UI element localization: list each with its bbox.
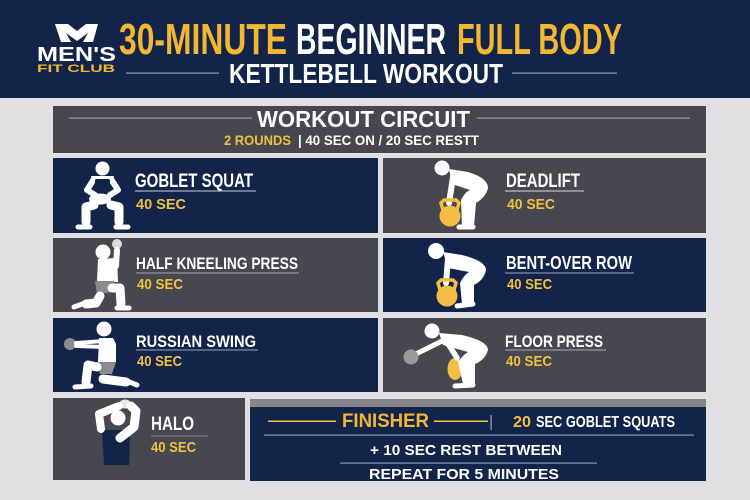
panel: bent-over row: BENT-OVER ROW [506, 253, 632, 273]
icon: floor press figure [404, 324, 488, 386]
panel: floor press: FLOOR PRESS [505, 332, 603, 351]
panel: goblet squat: 40 SEC [136, 196, 186, 213]
panel: workout circuit heading: 2 ROUNDS [224, 132, 291, 148]
panel: finisher: SEC GOBLET SQUATS [536, 414, 675, 431]
icon: deadlift figure [434, 160, 488, 227]
icon: halo figure [99, 400, 136, 465]
title line 1: FULL BODY [457, 15, 622, 64]
title line 2: KETTLEBELL WORKOUT [229, 58, 503, 89]
panel: russian swing [53, 318, 378, 392]
panel: halo: HALO [151, 414, 194, 435]
panel: bent-over row [383, 238, 706, 312]
panel: half kneeling press [53, 238, 378, 312]
logo [37, 24, 116, 75]
panel: workout circuit heading: WORKOUT CIRCUIT [257, 106, 470, 132]
panel: deadlift: 40 SEC [507, 196, 555, 213]
panel: workout circuit heading [53, 106, 706, 153]
panel: finisher: FINISHER [342, 411, 429, 432]
panel: finisher: + 10 SEC REST BETWEEN [370, 442, 562, 459]
header banner [0, 0, 750, 98]
panel: bent-over row: 40 SEC [507, 276, 552, 293]
panel: russian swing: RUSSIAN SWING [136, 332, 256, 351]
panel: finisher: REPEAT FOR 5 MINUTES [369, 466, 559, 483]
panel: russian swing: 40 SEC [137, 353, 182, 370]
panel: deadlift: DEADLIFT [506, 171, 580, 192]
title line 1 [119, 15, 622, 64]
panel: deadlift [383, 158, 706, 233]
title line 1: BEGINNER [296, 15, 446, 64]
panel: halo: 40 SEC [151, 439, 196, 456]
panel: half kneeling press: 40 SEC [137, 276, 183, 293]
logo: MEN'S [37, 44, 116, 66]
panel: floor press: 40 SEC [506, 353, 552, 370]
panel: goblet squat: GOBLET SQUAT [135, 171, 253, 192]
panel: half kneeling press: HALF KNEELING PRESS [136, 254, 298, 273]
panel: finisher: 20 [513, 414, 531, 431]
icon: russian swing figure [64, 322, 137, 387]
panel: floor press [383, 318, 706, 392]
icon: bent-over row figure [428, 243, 486, 306]
panel: halo [53, 398, 245, 480]
panel: goblet squat [53, 158, 378, 233]
panel: finisher [250, 399, 706, 483]
icon: goblet squat figure [78, 162, 128, 227]
panel: workout circuit heading: | 40 SEC ON / 20 SEC RESTT [298, 132, 479, 148]
title line 1: 30-MINUTE [119, 15, 287, 64]
icon: half kneeling press figure [74, 239, 129, 308]
logo: FIT CLUB [37, 63, 115, 75]
